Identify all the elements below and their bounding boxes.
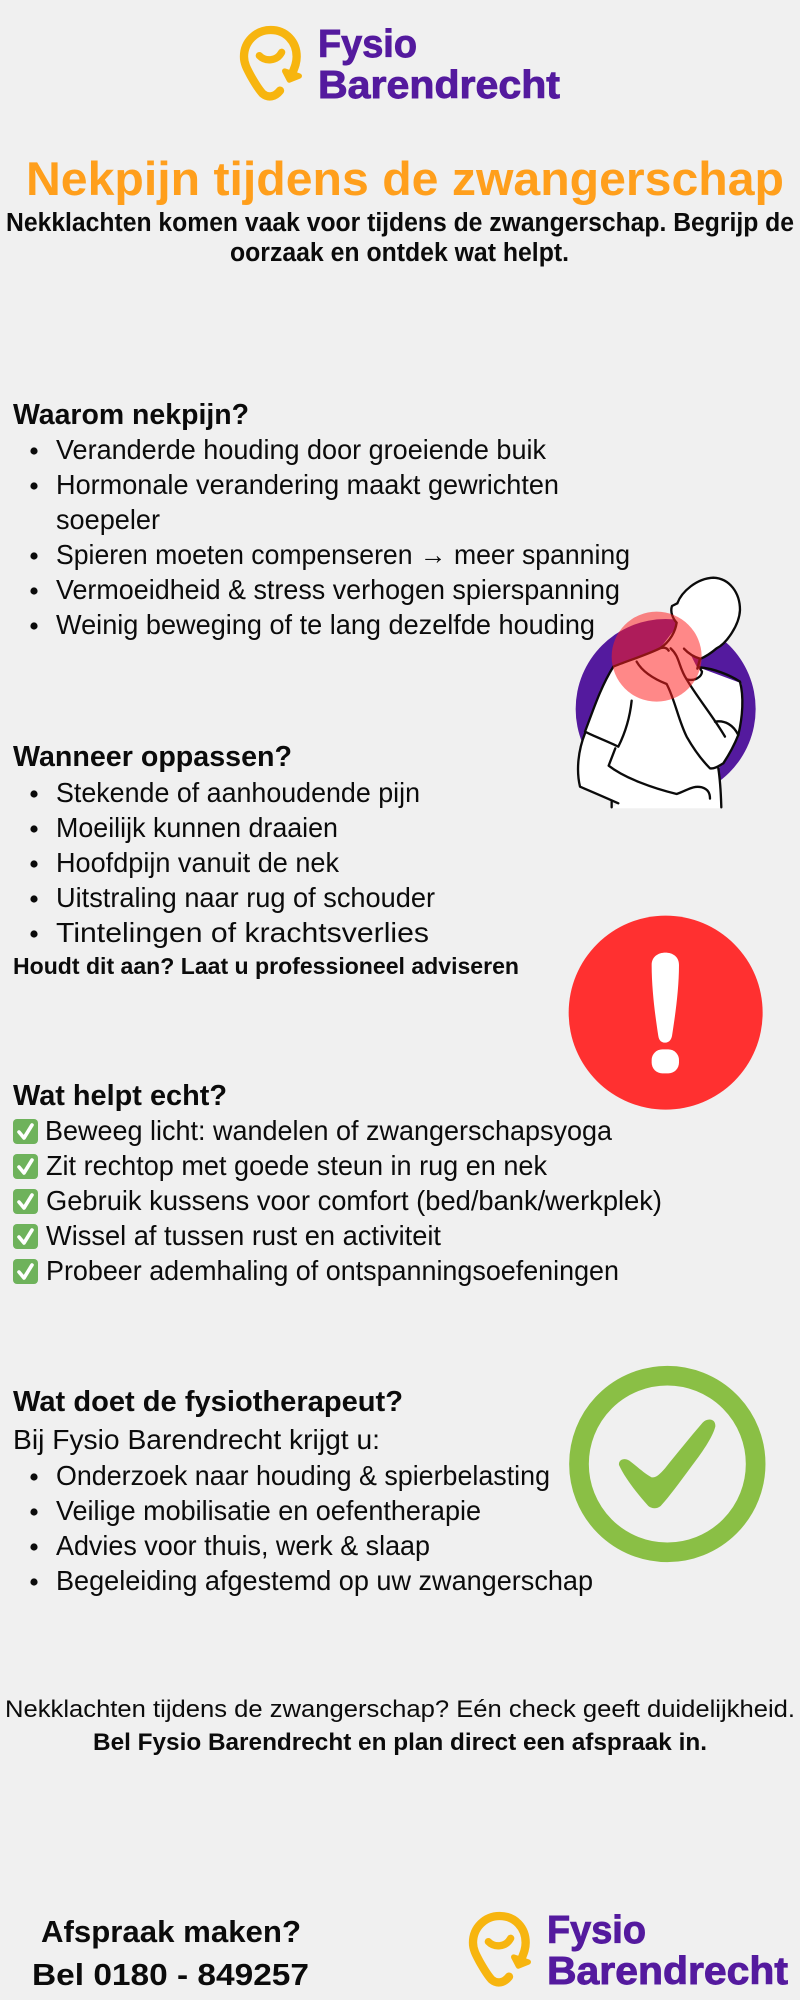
call to action text [5, 1696, 795, 1756]
call to action text: Nekklachten tijdens de zwangerschap? Eén check geeft duidelijkheid. [5, 1696, 795, 1723]
bullet list: Moeilijk kunnen draaien [56, 812, 338, 843]
icon: person holding painful neck [576, 578, 756, 808]
contact block: Bel 0180 - 849257 [32, 1957, 309, 1992]
intro line: Bij Fysio Barendrecht krijgt u: [13, 1424, 380, 1455]
icon: green check circle [579, 1376, 756, 1552]
check list: Probeer ademhaling of ontspanningsoefeningen [46, 1255, 619, 1286]
panel: wat helpt echt [13, 1080, 662, 1286]
icon: logo mark [244, 30, 299, 96]
icon: check [13, 1119, 38, 1144]
logo text: Fysio [547, 1909, 646, 1952]
contact block: Afspraak maken? [41, 1914, 301, 1949]
check list: Gebruik kussens voor comfort (bed/bank/werkplek) [46, 1185, 662, 1216]
contact block [32, 1914, 309, 1992]
logo text [318, 23, 560, 107]
logo text: Barendrecht [318, 64, 560, 107]
bullet list: Stekende of aanhoudende pijn [56, 777, 420, 808]
panel: wat doet de fysiotherapeut [13, 1386, 593, 1596]
bullet list [30, 434, 630, 640]
bullet list: Uitstraling naar rug of schouder [56, 882, 435, 913]
heading: Waarom nekpijn? [13, 399, 249, 431]
call to action text: Bel Fysio Barendrecht en plan direct een afspraak in. [93, 1729, 707, 1756]
check list: Wissel af tussen rust en activiteit [46, 1220, 441, 1251]
bullet list: Veilige mobilisatie en oefentherapie [56, 1495, 481, 1526]
subtitle [6, 209, 794, 267]
bullet list [30, 777, 435, 948]
subtitle: oorzaak en ontdek wat helpt. [230, 239, 569, 267]
bullet list: soepeler [56, 504, 160, 535]
panel: waarom nekpijn [13, 399, 630, 640]
bullet list: Tintelingen of krachtsverlies [56, 917, 429, 948]
bullet list: Vermoeidheid & stress verhogen spierspanning [56, 574, 620, 605]
check list: Zit rechtop met goede steun in rug en nek [46, 1150, 547, 1181]
icon: check [13, 1154, 38, 1179]
icon: red exclamation [569, 916, 763, 1110]
subtitle: Nekklachten komen vaak voor tijdens de zwangerschap. Begrijp de [6, 209, 794, 237]
icon: check [13, 1224, 38, 1249]
logo text [547, 1909, 788, 1993]
icon: logo mark [473, 1916, 528, 1982]
panel: wanneer oppassen [13, 741, 519, 979]
logo text: Fysio [318, 23, 417, 66]
bullet list: Spieren moeten compenseren → meer spanning [56, 539, 630, 570]
bullet list: Hormonale verandering maakt gewrichten [56, 469, 559, 500]
bullet list: Advies voor thuis, werk & slaap [56, 1530, 430, 1561]
bullet list [30, 1460, 593, 1596]
check list: Beweeg licht: wandelen of zwangerschapsyoga [45, 1115, 613, 1146]
logo: top [244, 23, 560, 107]
title: Nekpijn tijdens de zwangerschap [26, 152, 784, 205]
bullet list: Begeleiding afgestemd op uw zwangerschap [56, 1565, 593, 1596]
heading: Wat helpt echt? [13, 1080, 227, 1112]
logo: bottom [473, 1909, 788, 1993]
heading: Wat doet de fysiotherapeut? [13, 1386, 403, 1418]
icon: check [13, 1259, 38, 1284]
bullet list: Hoofdpijn vanuit de nek [56, 847, 339, 878]
bullet list: Weinig beweging of te lang dezelfde houding [56, 609, 595, 640]
advice note: Houdt dit aan? Laat u professioneel adviseren [13, 953, 519, 979]
bullet list: Onderzoek naar houding & spierbelasting [56, 1460, 550, 1491]
icon: check [13, 1189, 38, 1214]
logo text: Barendrecht [547, 1950, 788, 1993]
heading: Wanneer oppassen? [13, 741, 292, 773]
check list [13, 1115, 662, 1286]
bullet list: Veranderde houding door groeiende buik [56, 434, 546, 465]
